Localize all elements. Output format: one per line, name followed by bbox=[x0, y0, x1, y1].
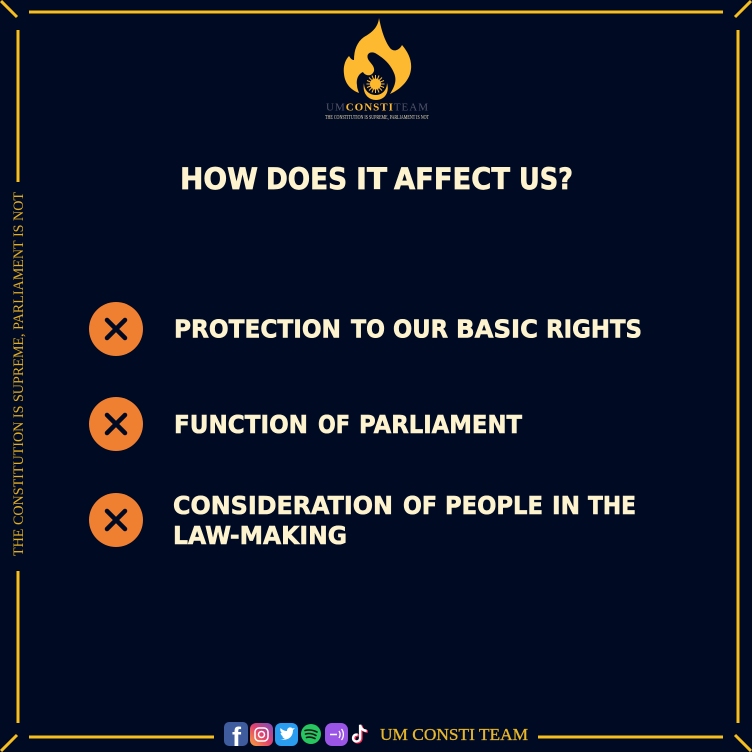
social icons row bbox=[224, 722, 368, 752]
item text: PEOPLE bbox=[445, 491, 543, 520]
icon: twitter bbox=[275, 723, 298, 746]
title: AFFECT bbox=[394, 162, 510, 196]
item text: LAW-MAKING bbox=[173, 521, 347, 550]
icon: crescent bbox=[364, 83, 388, 100]
logo wordmark: UMCONSTITEAM bbox=[326, 102, 428, 114]
icon: orange cross circle bbox=[89, 493, 143, 547]
icon: orange cross circle bbox=[89, 397, 143, 451]
list item: function of parliament bbox=[89, 397, 522, 451]
item text: FUNCTION bbox=[174, 410, 308, 439]
vertical tagline: THE CONSTITUTION IS SUPREME, PARLIAMENT IS NOT bbox=[11, 192, 27, 556]
icon: tiktok bbox=[353, 725, 368, 742]
logo tagline: THE CONSTITUTION IS SUPREME, PARLIAMENT IS NOT bbox=[325, 115, 429, 121]
icon: facebook bbox=[224, 722, 248, 752]
logo: UM Consti Team flame bbox=[325, 18, 429, 121]
title: US? bbox=[519, 162, 573, 196]
title bbox=[180, 162, 573, 196]
item text: OF bbox=[318, 410, 350, 439]
icon: instagram bbox=[250, 723, 273, 746]
item text: OF bbox=[403, 491, 437, 520]
item text: PARLIAMENT bbox=[359, 410, 522, 439]
title: HOW bbox=[180, 162, 258, 196]
icon: facebook: f bbox=[232, 722, 242, 752]
item text: TO bbox=[351, 314, 385, 344]
item text: OUR bbox=[393, 314, 448, 344]
item text: IN bbox=[552, 491, 580, 520]
item text: CONSIDERATION bbox=[173, 491, 393, 520]
item text: THE bbox=[588, 491, 636, 520]
icon: podcast bbox=[325, 723, 348, 746]
icon: sun bbox=[366, 75, 384, 93]
item text bbox=[174, 410, 522, 439]
footer team name: UM CONSTI TEAM bbox=[380, 725, 528, 744]
item text: BASIC bbox=[456, 314, 538, 344]
list item: basic rights bbox=[89, 302, 642, 356]
title: DOES bbox=[266, 162, 347, 196]
item text: PROTECTION bbox=[174, 314, 341, 344]
list item: consideration of people bbox=[89, 491, 636, 550]
item text: RIGHTS bbox=[546, 314, 642, 344]
title: IT bbox=[356, 162, 387, 196]
icon: orange cross circle bbox=[89, 302, 143, 356]
item text bbox=[174, 314, 642, 344]
icon: spotify bbox=[301, 724, 321, 744]
item text bbox=[173, 491, 636, 550]
icon: flame bbox=[344, 18, 411, 94]
